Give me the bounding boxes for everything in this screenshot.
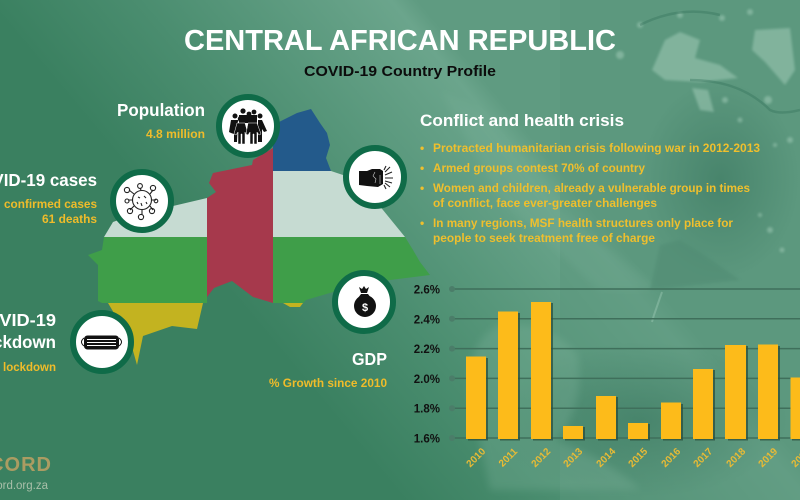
label: COVID-19 lockdown [0,310,56,374]
bullet list: • [420,181,424,195]
chart gridlines and y axis [414,284,800,446]
chart gridlines and y axis: 2.6% [414,284,440,296]
map band: red [207,148,273,303]
icon: money bag [335,273,393,331]
x axis year labels: 2016 [660,446,683,470]
label: COVID-19 cases [0,170,97,226]
label: GDP: % Growth since 2010 [269,376,387,390]
map band: yellow [108,303,303,365]
bullet list: • [420,141,424,155]
bullet list: • [420,161,424,175]
x axis year labels [465,446,800,470]
chart gridlines and y axis: 2.0% [414,374,440,386]
logo: ACCORD [0,454,52,492]
map band: white [104,171,405,237]
x axis year labels: 2011 [497,446,520,469]
bullet list: Protracted humanitarian crisis following war in 2012-2013 [433,141,760,155]
bullet list: • [420,216,424,230]
label: GDP: GDP [352,349,387,369]
chart gridlines and y axis: 2.2% [414,344,440,356]
map: Central African Republic in flag colours [88,109,430,365]
label: GDP [269,349,387,390]
x axis year labels: 2012 [530,446,553,470]
map band: green [88,237,430,303]
bullet list [420,141,760,245]
x axis year labels: 2017 [692,446,715,470]
text block: conflict and health crisis [420,111,760,245]
icon: face mask [73,313,131,371]
bars [466,302,800,440]
icon: money bag: $ [362,302,368,314]
heading: Conflict and health crisis [420,111,624,130]
bullet list: Armed groups contest 70% of country [433,161,645,175]
bullet list: Women and children, already a vulnerable group in times [433,181,750,195]
bullet list: of conflict, face ever-greater challenges [433,196,657,210]
chart gridlines and y axis: 1.8% [414,404,440,416]
chart gridlines and y axis: 1.6% [414,434,440,446]
label: population: Population [117,100,205,120]
x axis year labels: 2019 [757,446,780,470]
x axis year labels: 2014 [595,446,618,470]
icon: fist [346,148,404,206]
chart gridlines and y axis: 2.4% [414,314,440,326]
bar chart: GDP growth [414,284,800,470]
label: COVID-19 cases: confirmed cases [4,197,97,211]
bullet list: In many regions, MSF health structures only place for [433,216,733,230]
x axis year labels: 2015 [627,446,650,470]
bullet list: people to seek treatment free of charge [433,231,655,245]
label: population [117,100,205,141]
icon: people [219,97,277,155]
subtitle: COVID-19 Country Profile [304,63,496,80]
x axis year labels: 2010 [465,446,488,470]
label: COVID-19 cases: 61 deaths [42,212,97,226]
label: population: 4.8 million [146,127,205,141]
icon: virus [113,172,171,230]
x axis year labels: 2018 [725,446,748,470]
x axis year labels: 2013 [562,446,585,470]
label: COVID-19 lockdown: lockdown [3,360,56,374]
map band: blue [273,109,331,172]
title: CENTRAL AFRICAN REPUBLIC [184,25,616,57]
